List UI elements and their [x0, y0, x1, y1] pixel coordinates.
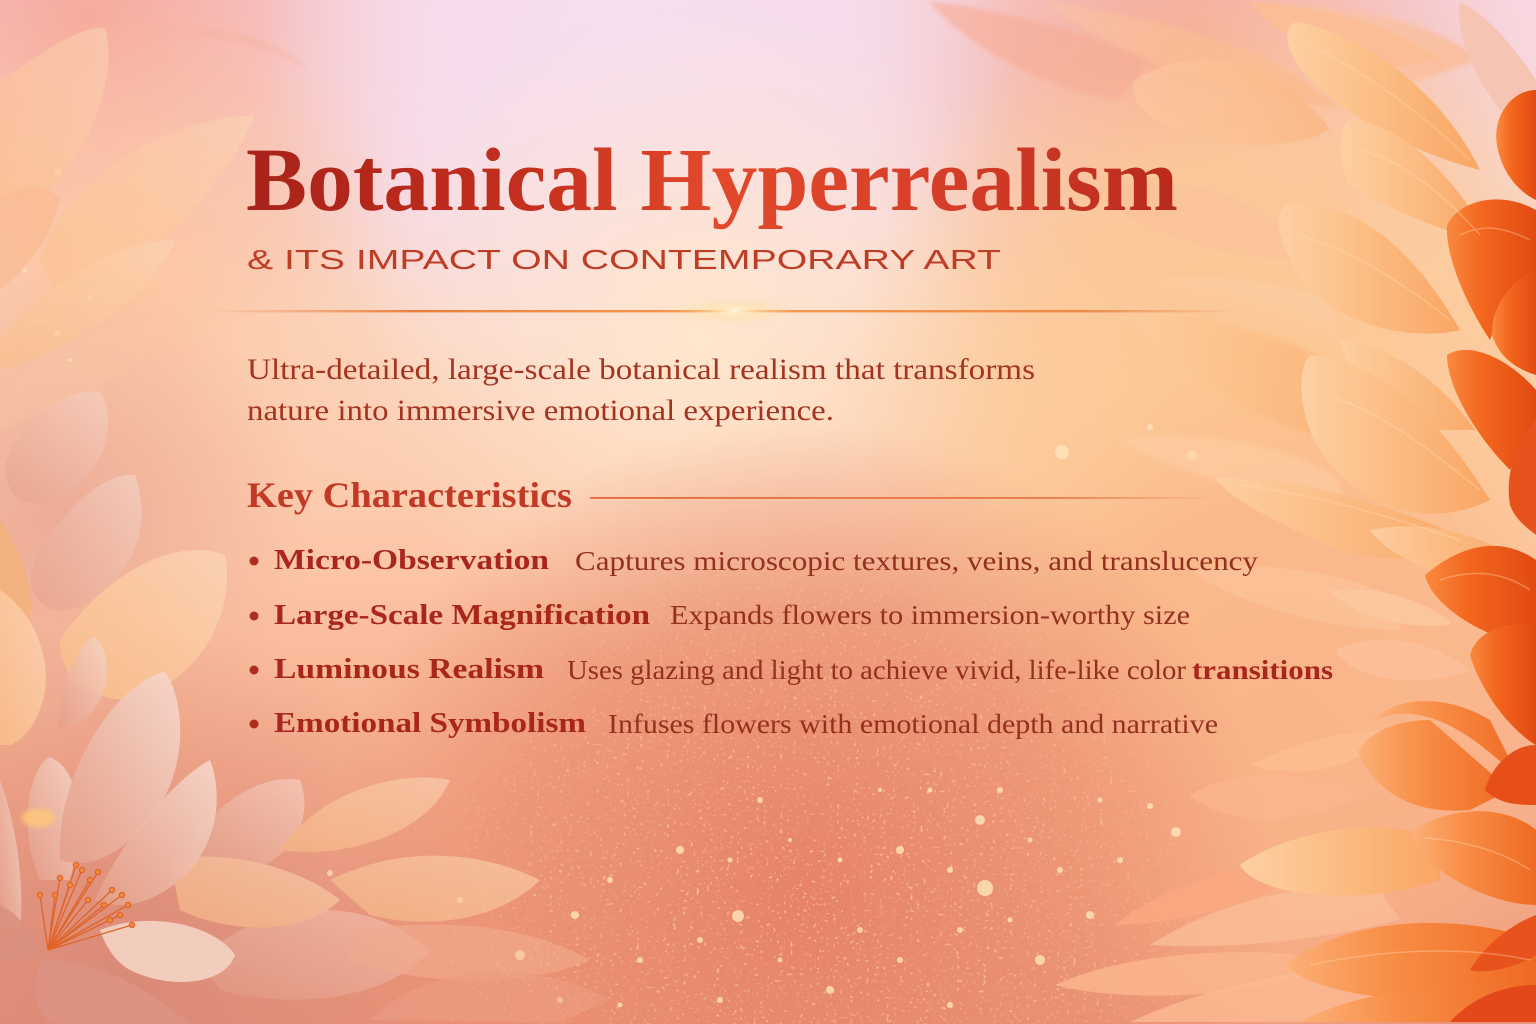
list item: large-scale magnification — [250, 600, 1190, 631]
list item: luminous realism: transitions — [1192, 655, 1333, 685]
petal veins — [1240, 45, 1530, 965]
right flower: deep orange petals — [1285, 90, 1536, 1022]
left flower: front blossom — [0, 672, 235, 1024]
list item: emotional symbolism — [250, 708, 1218, 739]
intro text: nature into immersive emotional experience. — [247, 394, 834, 427]
list item: micro-observation: Micro-Observation — [274, 545, 549, 576]
list item: large-scale magnification: Large-Scale Magnification — [274, 600, 650, 631]
intro text — [247, 353, 1035, 427]
list item: luminous realism: Uses glazing and light to achieve vivid, life-like color — [567, 655, 1186, 685]
left flower: soft lower spreading petals — [170, 778, 610, 1022]
list item: emotional symbolism: Emotional Symbolism — [274, 708, 586, 739]
list item: large-scale magnification: Expands flowers to immersion-worthy size — [670, 600, 1190, 630]
top faded petals — [20, 2, 1480, 110]
list item: luminous realism — [250, 654, 1333, 685]
subtitle: & ITS IMPACT ON CONTEMPORARY ART — [247, 244, 1001, 275]
left flower: middle petals — [0, 391, 227, 745]
intro text: Ultra-detailed, large-scale botanical realism that transforms — [247, 353, 1035, 386]
title: Botanical Hyperrealism — [246, 131, 1178, 230]
list item: emotional symbolism: Infuses flowers with emotional depth and narrative — [608, 709, 1218, 739]
section heading: Key Characteristics — [247, 475, 572, 515]
sparkle field — [23, 169, 1202, 1024]
list item: luminous realism: Luminous Realism — [274, 654, 544, 685]
left glints — [21, 809, 333, 876]
list item: micro-observation — [250, 545, 1259, 576]
flower stamens — [37, 862, 135, 950]
right flower: pale outer petals — [1055, 60, 1470, 1022]
list item: micro-observation: Captures microscopic textures, veins, and translucency — [575, 546, 1259, 576]
right flower: peach petals — [1240, 2, 1536, 896]
title divider — [205, 298, 1235, 324]
left flower: upper pale petals — [0, 28, 255, 430]
